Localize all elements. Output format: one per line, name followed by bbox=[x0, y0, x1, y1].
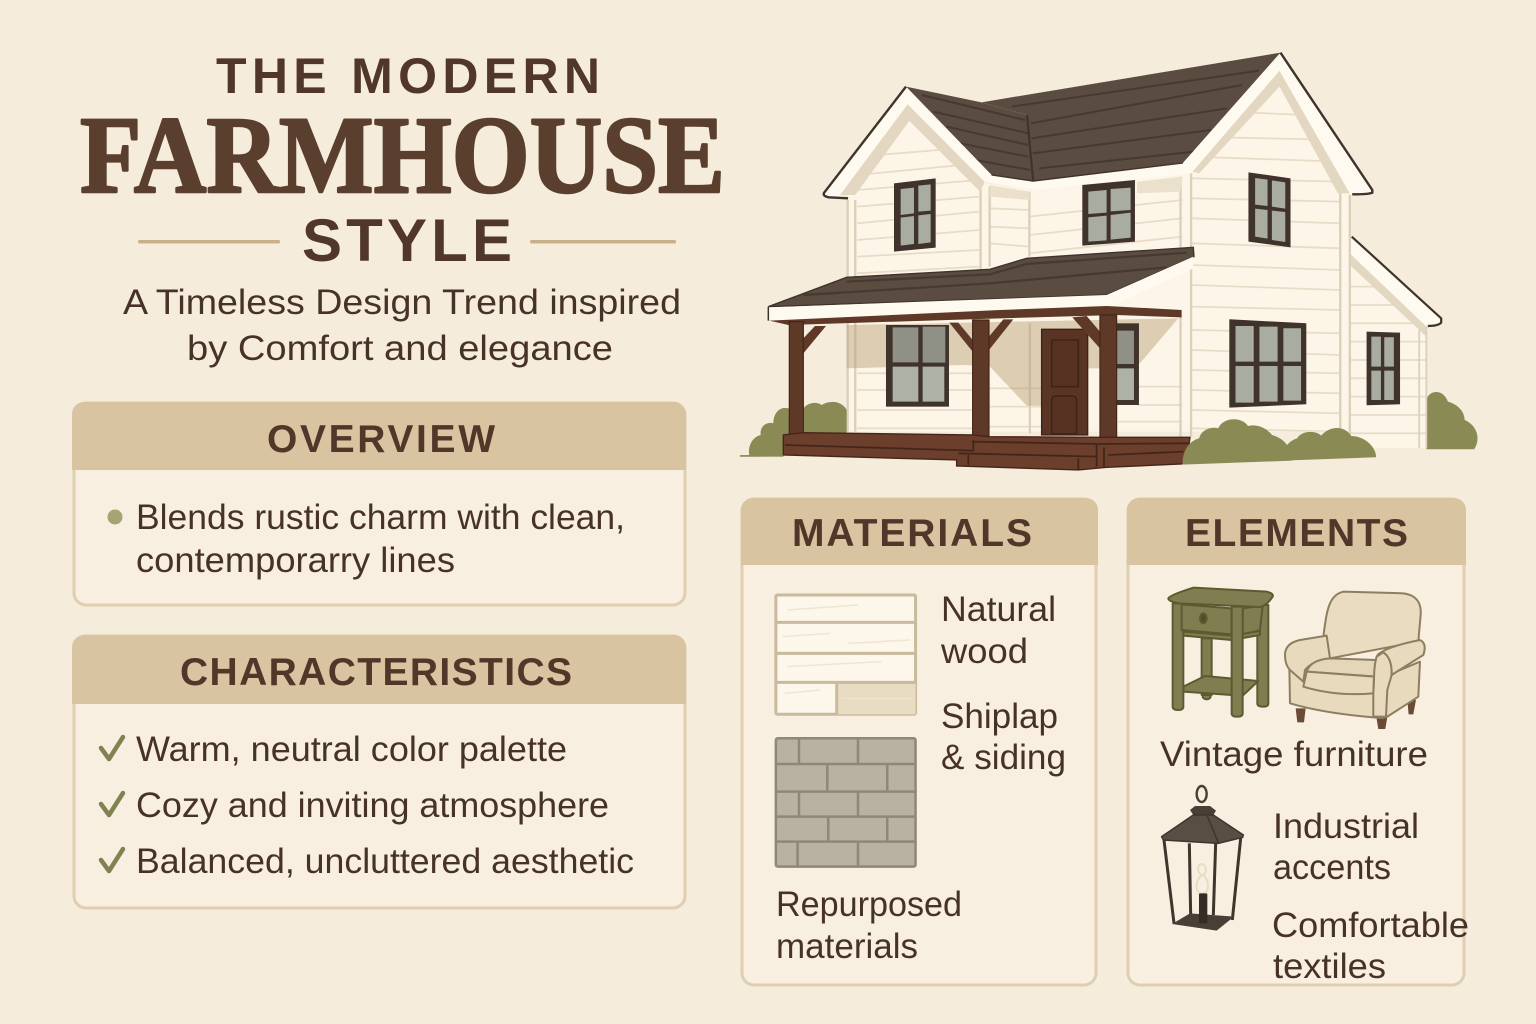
elements labels: Industrial bbox=[1273, 807, 1419, 846]
heading: materials: MATERIALS bbox=[792, 512, 1032, 555]
side wing bbox=[1350, 237, 1441, 448]
porch bbox=[740, 247, 1194, 470]
subtitle: A Timeless Design Trend inspired bbox=[123, 283, 681, 322]
main walls bbox=[848, 71, 1350, 432]
heading: elements: ELEMENTS bbox=[1185, 512, 1408, 555]
porch right window bbox=[1115, 323, 1139, 405]
characteristics list bbox=[136, 730, 634, 881]
back bush right bbox=[1426, 392, 1478, 449]
heading: characteristics: CHARACTERISTICS bbox=[180, 651, 572, 694]
upper left window bbox=[894, 178, 936, 252]
check icons bbox=[101, 737, 123, 871]
upper center window bbox=[1082, 180, 1135, 246]
elements labels: accents bbox=[1273, 848, 1391, 887]
overview text bbox=[136, 498, 625, 580]
panel: characteristics bbox=[72, 635, 686, 908]
elements labels: Vintage furniture bbox=[1160, 735, 1428, 774]
swatch: brick bbox=[776, 738, 916, 867]
fascia shadows bbox=[840, 104, 985, 195]
characteristics list: Cozy and inviting atmosphere bbox=[136, 786, 609, 825]
characteristics list: Warm, neutral color palette bbox=[136, 730, 567, 769]
materials labels: materials bbox=[776, 927, 918, 966]
icon: armchair bbox=[1285, 592, 1425, 729]
overview text: Blends rustic charm with clean, bbox=[136, 498, 625, 537]
elements labels: textiles bbox=[1273, 947, 1386, 986]
panel: materials bbox=[741, 498, 1098, 985]
beam and posts bbox=[769, 306, 1182, 443]
icon: lantern bbox=[1162, 786, 1243, 931]
materials labels bbox=[776, 590, 1066, 966]
icon: side table bbox=[1168, 588, 1273, 717]
materials labels: Natural bbox=[941, 590, 1056, 629]
title: FARMHOUSE bbox=[80, 94, 725, 216]
porch left window bbox=[886, 325, 949, 407]
side wing window bbox=[1367, 332, 1400, 405]
swatch: shiplap bbox=[776, 595, 916, 714]
title bbox=[80, 48, 725, 274]
materials labels: & siding bbox=[941, 738, 1066, 777]
overview text: contemporarry lines bbox=[136, 541, 455, 580]
panel: elements bbox=[1127, 498, 1469, 986]
elements labels bbox=[1160, 735, 1469, 986]
porch shadow bbox=[847, 318, 1178, 406]
door bbox=[1042, 329, 1088, 435]
house body bbox=[823, 53, 1478, 449]
subtitle: by Comfort and elegance bbox=[187, 329, 613, 368]
corner trim bbox=[848, 173, 1350, 448]
materials labels: wood bbox=[940, 632, 1028, 671]
title: THE MODERN bbox=[216, 48, 600, 104]
elements labels: Comfortable bbox=[1272, 906, 1469, 945]
panel: overview bbox=[72, 402, 686, 605]
illustration: farmhouse bbox=[740, 53, 1478, 470]
siding bbox=[857, 110, 1340, 432]
materials labels: Shiplap bbox=[941, 697, 1058, 736]
materials labels: Repurposed bbox=[776, 885, 962, 924]
left bush bbox=[740, 402, 847, 457]
lower right window bbox=[1229, 319, 1306, 408]
deck bbox=[783, 433, 1190, 470]
porch roof bbox=[768, 247, 1194, 321]
title: STYLE bbox=[302, 207, 512, 274]
main roof bbox=[906, 53, 1280, 181]
characteristics list: Balanced, uncluttered aesthetic bbox=[136, 842, 634, 881]
subtitle bbox=[123, 283, 681, 368]
bullet bbox=[108, 510, 122, 524]
heading: overview: OVERVIEW bbox=[267, 418, 495, 461]
fascia trim bbox=[823, 53, 1372, 198]
upper windows bbox=[894, 178, 1135, 252]
upper right window bbox=[1248, 172, 1291, 247]
front bushes bbox=[1182, 419, 1376, 465]
materials swatches bbox=[776, 595, 916, 867]
